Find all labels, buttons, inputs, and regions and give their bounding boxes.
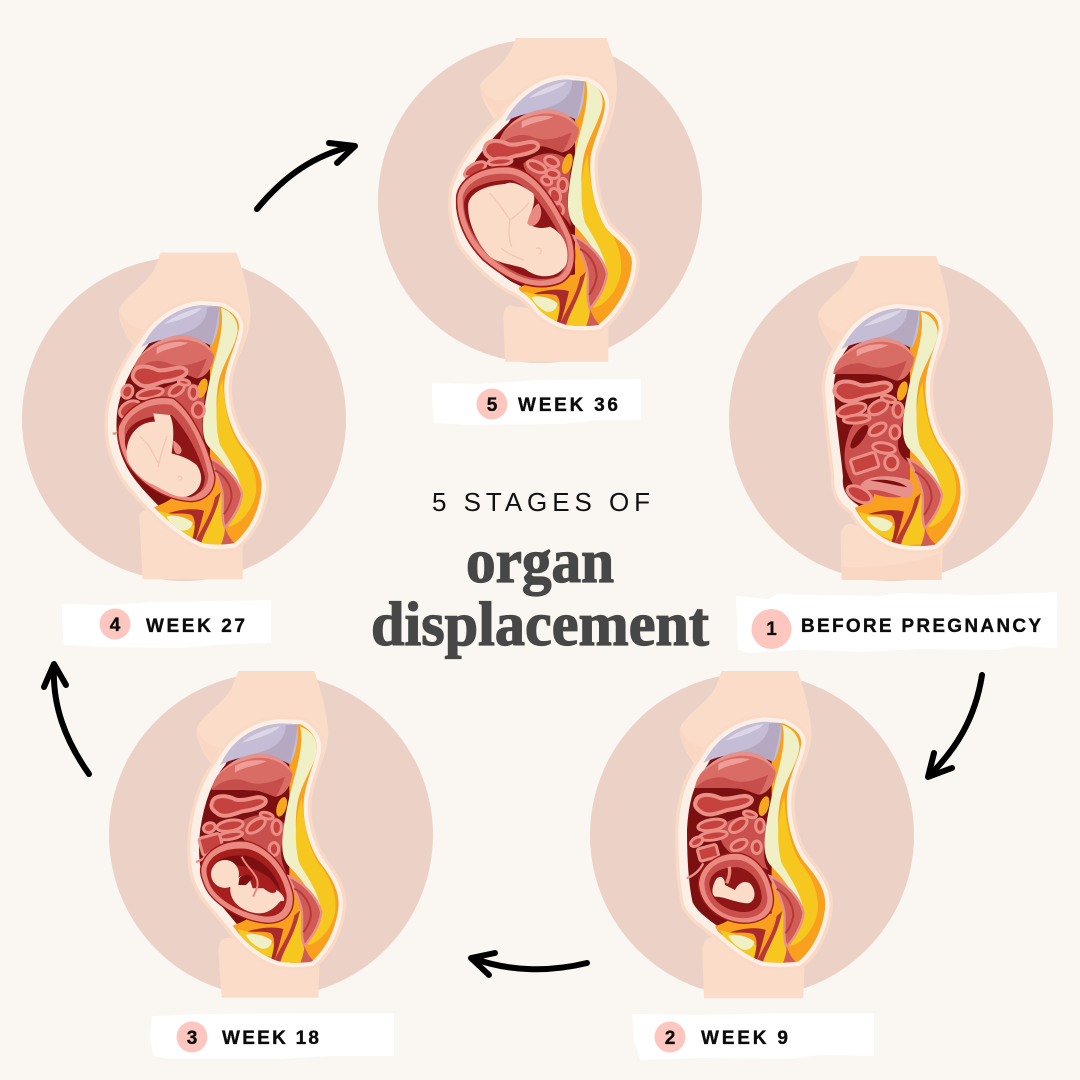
circle backdrop: week 9	[590, 673, 914, 997]
anatomy figure: week 27	[104, 252, 270, 580]
label: week 36	[432, 379, 641, 425]
circle backdrop: week 27	[22, 257, 346, 581]
label: before pregnancy	[736, 592, 1057, 653]
label: week 27: WEEK 27	[146, 616, 245, 637]
title: 5 stages of: 5 STAGES OF	[432, 487, 650, 517]
label: week 9	[632, 1013, 874, 1060]
circle backdrop: week 18	[109, 673, 433, 997]
label: week 18	[150, 1013, 394, 1059]
label: week 36: 5	[487, 395, 498, 416]
label: week 9: 2	[665, 1028, 675, 1049]
label: week 27	[62, 600, 271, 648]
heading: organ displacement: displacement	[371, 591, 709, 659]
circle backdrop: week 36	[378, 39, 702, 363]
heading: organ displacement	[371, 528, 709, 659]
anatomy figure: before pregnancy	[818, 256, 1010, 580]
anatomy figure: week 18	[187, 671, 346, 998]
anatomy figure: week 9	[675, 671, 833, 998]
circle backdrop: before pregnancy	[729, 257, 1053, 581]
label: before pregnancy: BEFORE PREGNANCY	[801, 616, 1041, 637]
arrow: before pregnancy to week 9	[928, 675, 982, 777]
anatomy figure: week 36	[448, 38, 640, 362]
label: week 36: WEEK 36	[518, 395, 618, 416]
label: week 18: WEEK 18	[222, 1028, 319, 1049]
label: week 9: WEEK 9	[701, 1028, 788, 1049]
arrow: week 27 to week 36	[257, 143, 355, 209]
arrow: week 18 to week 27	[44, 664, 89, 774]
label: week 18: 3	[187, 1028, 197, 1049]
label: week 27: 4	[110, 615, 121, 636]
heading: organ displacement: organ	[466, 528, 614, 596]
arrow: week 9 to week 18	[471, 953, 587, 975]
label: before pregnancy: 1	[766, 619, 777, 640]
